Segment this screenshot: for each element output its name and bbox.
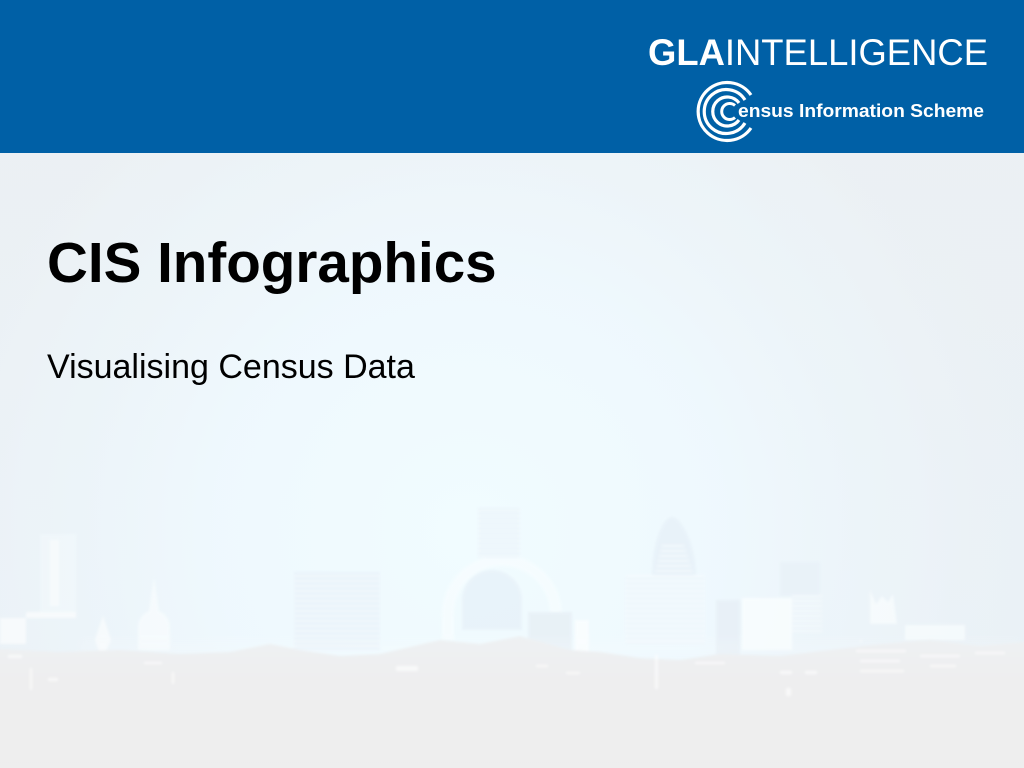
header band <box>0 0 1024 153</box>
foreground tree line <box>0 636 1024 768</box>
logos: GLA Intelligence and Census Information Scheme <box>648 32 988 142</box>
title: CIS Infographics <box>47 231 497 294</box>
subtitle: Visualising Census Data <box>47 348 415 386</box>
wordmark: GLA Intelligence: GLAINTELLIGENCE <box>648 32 988 73</box>
wordmark: Census Information Scheme: ensus Information Scheme <box>738 101 984 121</box>
icon: concentric C rings <box>698 82 751 140</box>
